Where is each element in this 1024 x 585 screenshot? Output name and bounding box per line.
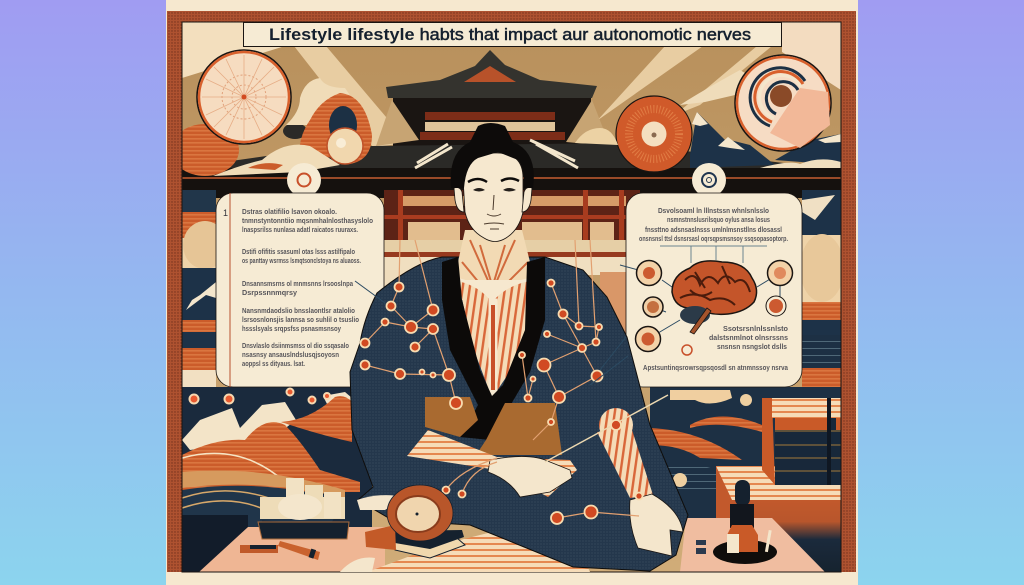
chest	[458, 280, 528, 398]
hair	[451, 123, 534, 188]
panel: left text list: 1	[223, 208, 228, 218]
panel: left text list: Dstras olatifilio lsavon okoalo.	[242, 207, 337, 216]
frame border	[167, 11, 856, 572]
book with compass	[365, 485, 465, 558]
circle diagram: nerve wheel	[197, 50, 291, 144]
figure: seated man in kimono	[340, 123, 688, 572]
tray with rolled bandages	[258, 478, 349, 539]
legs	[367, 525, 590, 572]
panel: left text list: aoppsl ss dityaus. lsat.	[242, 359, 305, 368]
panel: left text list: os panttay wsrmss lsmqtsonclstoya ns aluaoss.	[242, 256, 361, 265]
circle diagram: radial orange disc	[616, 96, 692, 172]
brows and eyes	[468, 178, 519, 182]
panel: right brain diagram: Ssotsrsnlnlssnlsto	[723, 324, 788, 333]
panel: right brain diagram: snsnsn nsngslot dslls	[717, 342, 787, 351]
panel: left text list: nsasnsy ansauslndslusqjsoyosn	[242, 350, 339, 359]
sticks on table	[240, 541, 320, 560]
table left	[199, 527, 385, 572]
panel: right brain diagram	[620, 193, 802, 387]
table right	[680, 518, 825, 572]
wave scenery beside panels	[182, 190, 844, 390]
panel: right brain diagram: onsnsnsl ttsl dsnsrsasl oqrsqpsmsnsoy ssqsopasoptorp.	[639, 234, 788, 243]
title banner	[244, 22, 782, 46]
panel: left text list: Dstifi ofifitis ssasuml otas lsss astilfipalo	[242, 247, 355, 256]
connector lines	[620, 265, 780, 339]
icon: nerve node circles	[636, 260, 792, 355]
platform	[716, 466, 856, 572]
panel: right brain diagram: dalstsnmlnot olnsrssns	[709, 333, 788, 342]
panel: left text list	[216, 193, 384, 387]
foot	[357, 495, 405, 510]
temple	[182, 50, 841, 390]
right forearm	[597, 430, 653, 498]
waves lower right	[650, 387, 856, 522]
kimono body	[350, 257, 688, 571]
storage boxes	[762, 398, 856, 485]
leader lines	[355, 281, 628, 385]
obi	[425, 397, 478, 437]
arm nerve disc	[599, 408, 633, 442]
panel: left text list: lsrsosnlonsjis lannsa so suhlil o tsuslio	[242, 315, 359, 324]
panel: left text list: lnaspsrilss nunlasa adatl raicatos ruuraxs.	[242, 225, 358, 234]
circle diagram: spiral dome	[735, 55, 831, 151]
serum bottle in bowl	[713, 480, 777, 564]
panel: right brain diagram: Dsvolsoaml ln lllnstssn whnlsnlsslo	[658, 206, 769, 215]
left forearm	[407, 430, 577, 497]
panel: left text list: Nansnmdaodslio bnsslaontlsr atalolio	[242, 306, 355, 315]
title banner: Lifestyle lifestyle habts that impact aur autonomotic nerves	[269, 25, 751, 44]
panel: left text list: Dnsvlaslo dsiinmsmss ol dio ssqasalo	[242, 341, 349, 350]
panel: left text list: Dsrpssnnmqrsy	[242, 288, 298, 297]
hair pins	[415, 140, 578, 168]
small blocks	[696, 540, 706, 554]
waves lower left	[182, 387, 372, 572]
panel: right brain diagram: fnssttno adsnsaslnsss umlnlmsnstllns dlosassl	[645, 225, 782, 234]
nose and mouth	[484, 195, 504, 229]
panel: left text list: tnmnstyntonntiio mqsnmhalnlosthasyslolo	[242, 216, 373, 225]
wave scenery left upper	[171, 78, 372, 176]
ears	[454, 188, 532, 212]
right hand	[630, 494, 683, 556]
nerve branches	[365, 240, 639, 518]
paper lanterns	[190, 388, 330, 404]
icon: brain	[672, 261, 757, 334]
scene background	[182, 22, 841, 572]
bracket lines	[660, 246, 767, 263]
neck	[458, 230, 530, 300]
mountains right upper	[575, 70, 841, 168]
left hand	[488, 456, 572, 497]
panel: left text list: hssslsyals srqpsfss psnasmsnsoy	[242, 324, 342, 333]
head	[463, 153, 523, 242]
tab icon right	[692, 163, 726, 197]
tab icon left	[287, 163, 321, 197]
panel: right brain diagram: Apstsuntinqsrowrsqpsqosdl sn atnmnssoy nsrva	[643, 363, 789, 372]
panel: right brain diagram: nsmnstnnslusrilsquo oylus ansa losus	[667, 215, 770, 224]
poster sheet	[166, 0, 858, 585]
panel: left text list: Dnsannsmsrns ol mnmsnns lrsooslnpa	[242, 279, 354, 288]
collar	[442, 257, 545, 440]
nerve nodes	[360, 280, 642, 524]
